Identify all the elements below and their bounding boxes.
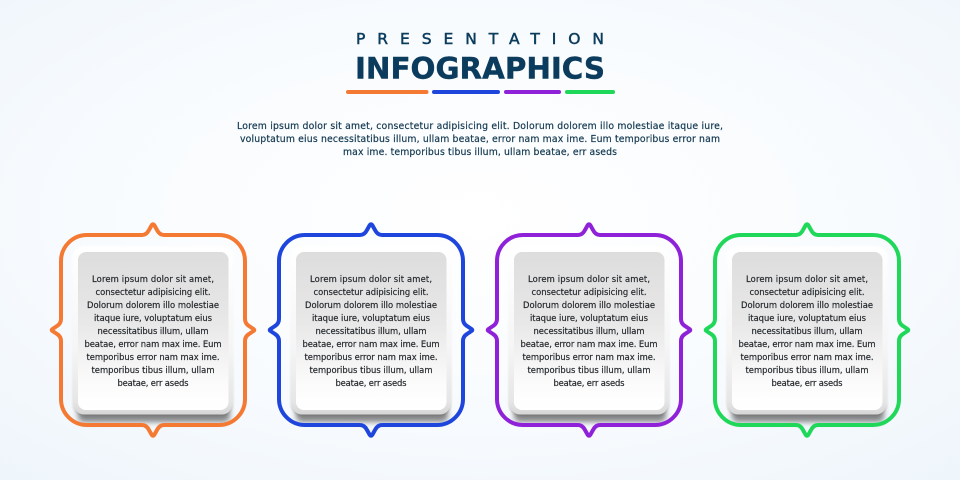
card text: Lorem ipsum dolor sit amet, [310, 274, 432, 284]
intro paragraph [237, 121, 723, 158]
card text [84, 274, 222, 388]
card text: necessitatibus illum, ullam [534, 326, 644, 336]
card text: temporibus error nam max ime. [740, 352, 874, 362]
card face [514, 252, 664, 410]
card text: temporibus tibus illum, ullam [310, 365, 432, 375]
card glow [290, 246, 452, 416]
card text: Lorem ipsum dolor sit amet, [528, 274, 650, 284]
blue bracket frame [270, 224, 472, 436]
card text: Dolorum dolorem illo molestiae [523, 300, 655, 310]
panel: blue card [270, 224, 472, 436]
card text: consectetur adipisicing elit. [750, 287, 864, 297]
card text [738, 274, 876, 388]
card text: temporibus tibus illum, ullam [92, 365, 214, 375]
intro paragraph: voluptatum eius necessitatibus illum, ullam beatae, error nam max ime. Eum temporibus error nam [240, 134, 720, 145]
card shadow [732, 407, 884, 422]
panel: purple card [488, 224, 690, 436]
panel: green card [706, 224, 908, 436]
card text: beatae, error nam max ime. Eum [302, 339, 440, 349]
card glow [508, 246, 670, 416]
card shadow [78, 407, 230, 422]
title underline segments [346, 90, 615, 94]
card base [510, 250, 668, 414]
card text [302, 274, 440, 388]
card shadow [514, 407, 666, 422]
card text: beatae, err aseds [336, 378, 406, 388]
card text [520, 274, 658, 388]
card base [728, 250, 886, 414]
title block [346, 30, 615, 94]
card text: beatae, error nam max ime. Eum [84, 339, 222, 349]
card face [732, 252, 882, 410]
card text: consectetur adipisicing elit. [532, 287, 646, 297]
card text: itaque iure, voluptatum eius [748, 313, 866, 323]
card text: temporibus error nam max ime. [304, 352, 438, 362]
card text: beatae, err aseds [772, 378, 842, 388]
card text: Dolorum dolorem illo molestiae [305, 300, 437, 310]
card text: itaque iure, voluptatum eius [312, 313, 430, 323]
card shadow [296, 407, 448, 422]
card text: beatae, err aseds [118, 378, 188, 388]
card glow [726, 246, 888, 416]
intro paragraph: max ime. temporibus tibus illum, ullam beatae, err aseds [343, 147, 617, 158]
card text: Lorem ipsum dolor sit amet, [92, 274, 214, 284]
card text: Dolorum dolorem illo molestiae [741, 300, 873, 310]
card glow [72, 246, 234, 416]
card text: Lorem ipsum dolor sit amet, [746, 274, 868, 284]
card text: temporibus error nam max ime. [86, 352, 220, 362]
card text: necessitatibus illum, ullam [752, 326, 862, 336]
card text: temporibus tibus illum, ullam [746, 365, 868, 375]
card text: Dolorum dolorem illo molestiae [87, 300, 219, 310]
panel: orange card [52, 224, 254, 436]
card text: necessitatibus illum, ullam [98, 326, 208, 336]
card text: itaque iure, voluptatum eius [530, 313, 648, 323]
card text: beatae, error nam max ime. Eum [738, 339, 876, 349]
orange bracket frame [52, 224, 254, 436]
card text: consectetur adipisicing elit. [314, 287, 428, 297]
card text: temporibus tibus illum, ullam [528, 365, 650, 375]
purple bracket frame [488, 224, 690, 436]
heading: infographics: INFOGRAPHICS [355, 52, 605, 86]
card text: necessitatibus illum, ullam [316, 326, 426, 336]
card base [74, 250, 232, 414]
card text: consectetur adipisicing elit. [96, 287, 210, 297]
card text: beatae, err aseds [554, 378, 624, 388]
intro paragraph: Lorem ipsum dolor sit amet, consectetur adipisicing elit. Dolorum dolorem illo molestiae itaque iure, [237, 121, 723, 132]
card text: beatae, error nam max ime. Eum [520, 339, 658, 349]
card text: temporibus error nam max ime. [522, 352, 656, 362]
card face [78, 252, 228, 410]
card text: itaque iure, voluptatum eius [94, 313, 212, 323]
green bracket frame [706, 224, 908, 436]
card base [292, 250, 450, 414]
card face [296, 252, 446, 410]
heading: presentation: PRESENTATION [356, 30, 604, 48]
